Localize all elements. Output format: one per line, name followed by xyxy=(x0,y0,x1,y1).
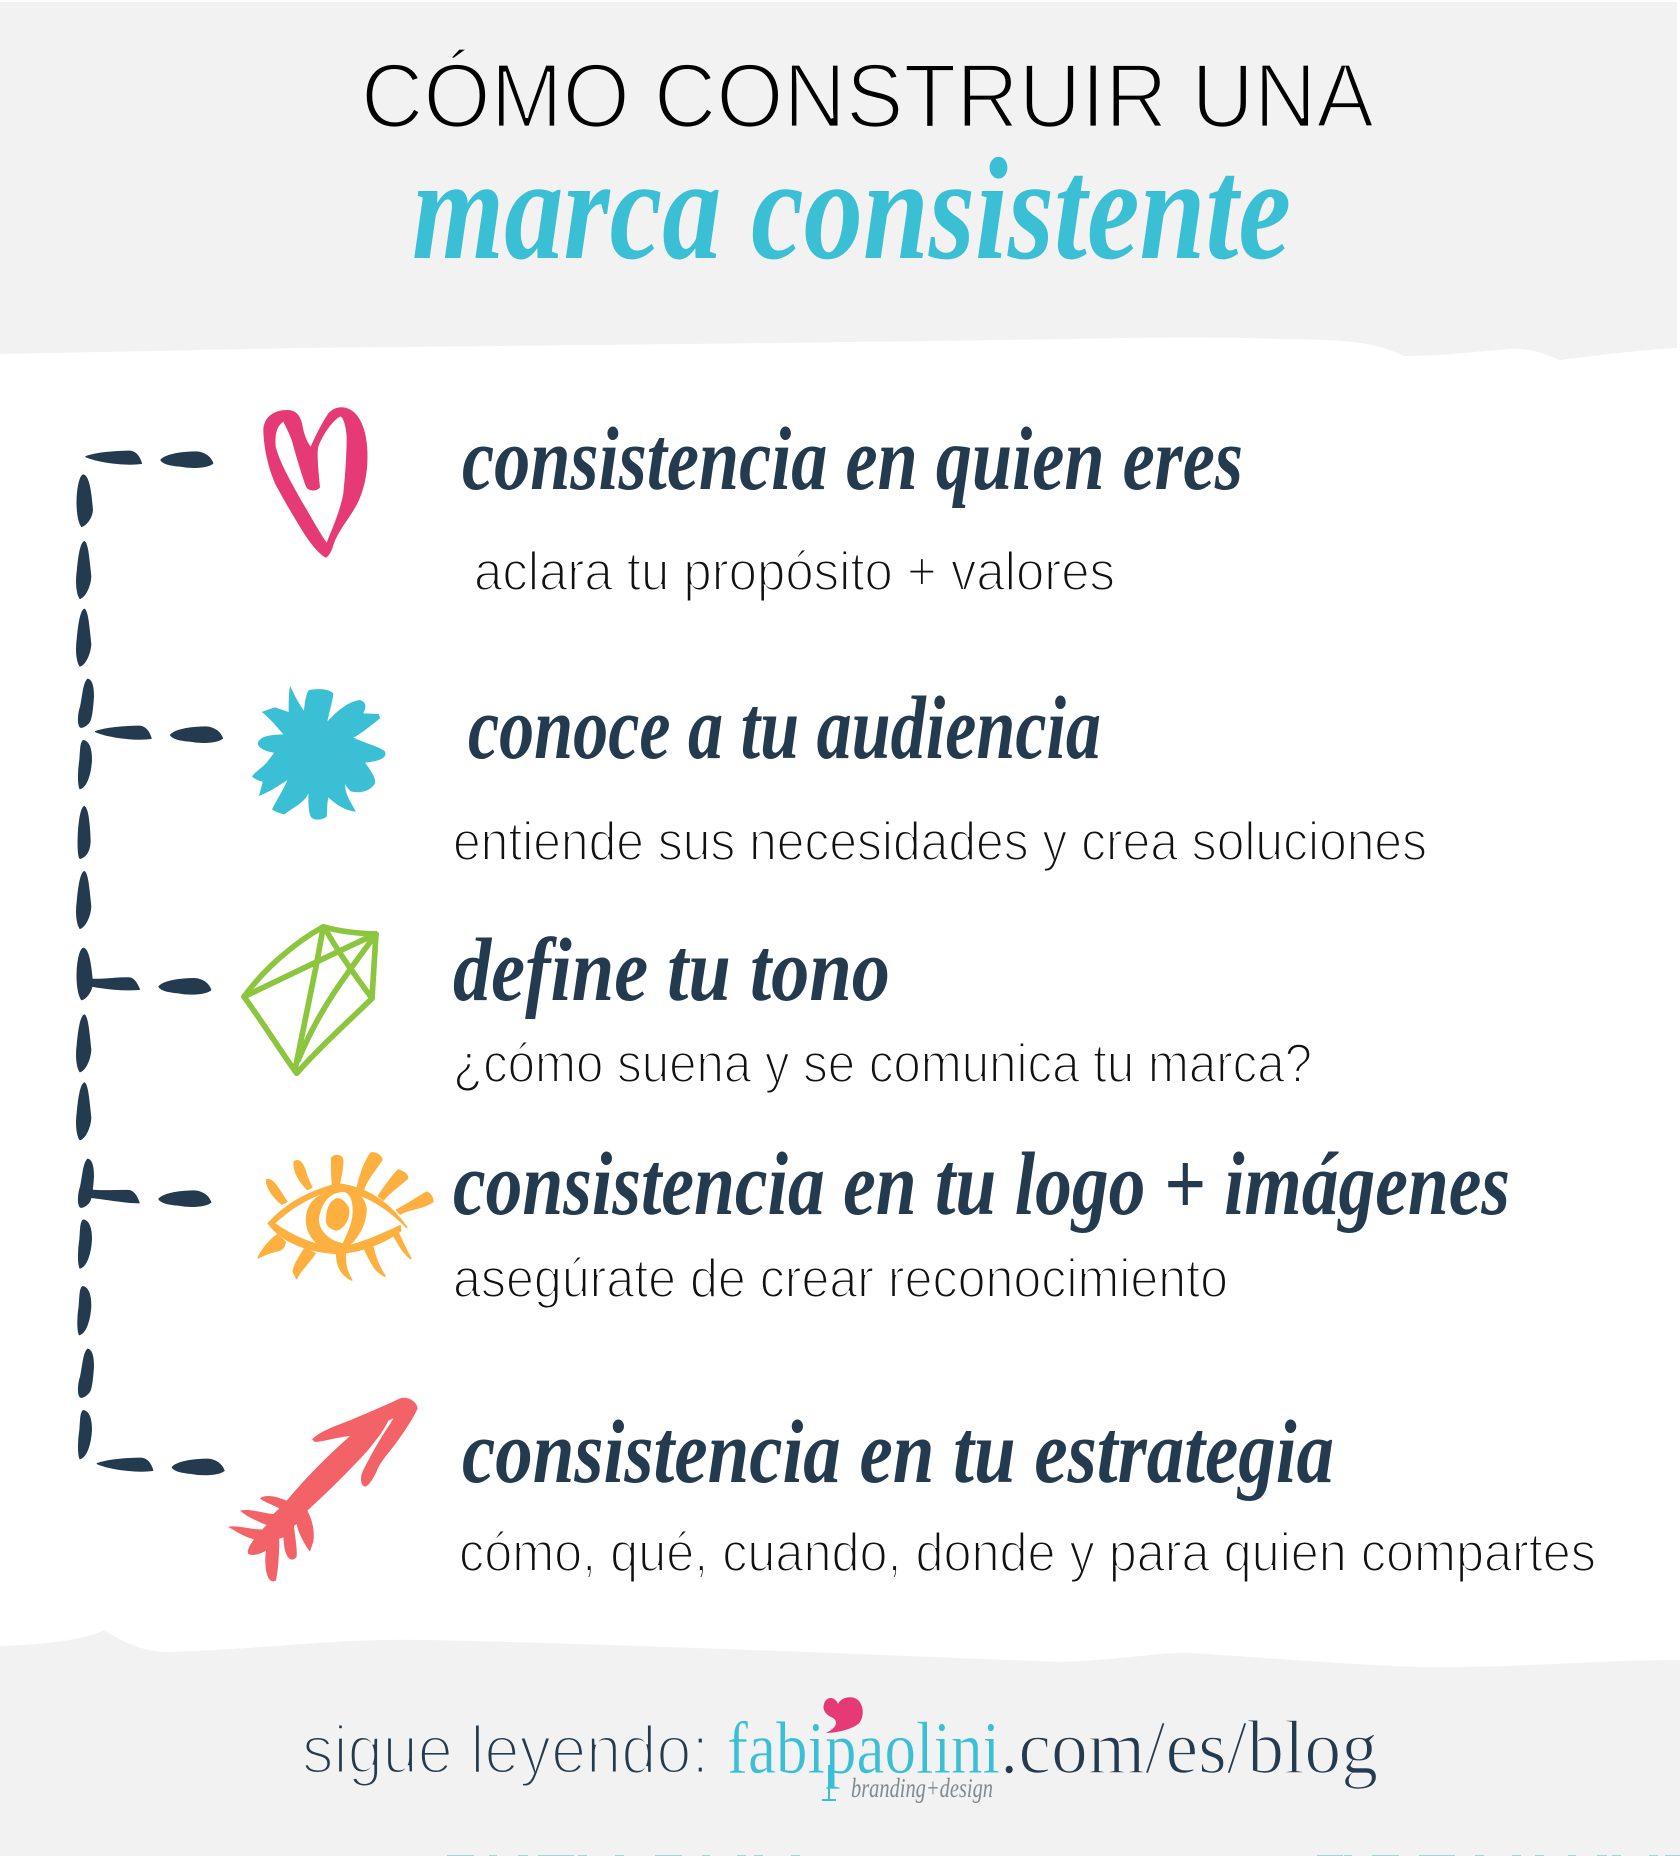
heading: define tu tono xyxy=(453,921,890,1020)
logo: fabipaolini wordmark xyxy=(727,1697,1000,1803)
description: cómo, qué, cuando, donde y para quien compartes xyxy=(459,1521,1596,1583)
description: entiende sus necesidades y crea soluciones xyxy=(453,810,1427,872)
dashed connector line xyxy=(77,451,224,1475)
cropped text strip at bottom edge xyxy=(447,1855,1680,1856)
logo tagline: branding+design xyxy=(851,1773,993,1803)
panel: footer background xyxy=(0,1630,1680,1856)
icon: teal splat xyxy=(252,686,385,820)
icon: logo heart xyxy=(823,1697,863,1733)
title: marca consistente: marca consistente xyxy=(412,128,1291,290)
description: aclara tu propósito + valores xyxy=(474,540,1115,602)
footer: url path: .com/es/blog xyxy=(1000,1706,1378,1790)
panel: header background xyxy=(0,2,1677,360)
description: ¿cómo suena y se comunica tu marca? xyxy=(453,1032,1312,1094)
logo p descender xyxy=(822,1765,836,1800)
panel: step 2 conoce a tu audiencia xyxy=(252,679,1427,872)
heading: consistencia en tu estrategia xyxy=(462,1403,1334,1502)
title: como construir una: CÓMO CONSTRUIR UNA xyxy=(361,46,1374,147)
footer: sigue leyendo label: sigue leyendo: xyxy=(302,1712,709,1788)
icon: coral arrow xyxy=(228,1398,418,1581)
icon: orange eye xyxy=(258,1153,433,1280)
panel: step 3 define tu tono xyxy=(244,921,1312,1094)
panel: step 4 consistencia en tu logo + imagenes xyxy=(258,1135,1510,1309)
icon: green gem xyxy=(244,927,376,1073)
heading: consistencia en quien eres xyxy=(462,410,1243,509)
description: asegúrate de crear reconocimiento xyxy=(453,1247,1228,1309)
panel: step 5 consistencia en tu estrategia xyxy=(228,1398,1596,1583)
logo text: fabipaolini xyxy=(727,1708,1000,1790)
icon: heart xyxy=(263,407,368,558)
heading: conoce a tu audiencia xyxy=(468,679,1101,778)
panel: step 1 consistencia en quien eres xyxy=(263,407,1243,602)
